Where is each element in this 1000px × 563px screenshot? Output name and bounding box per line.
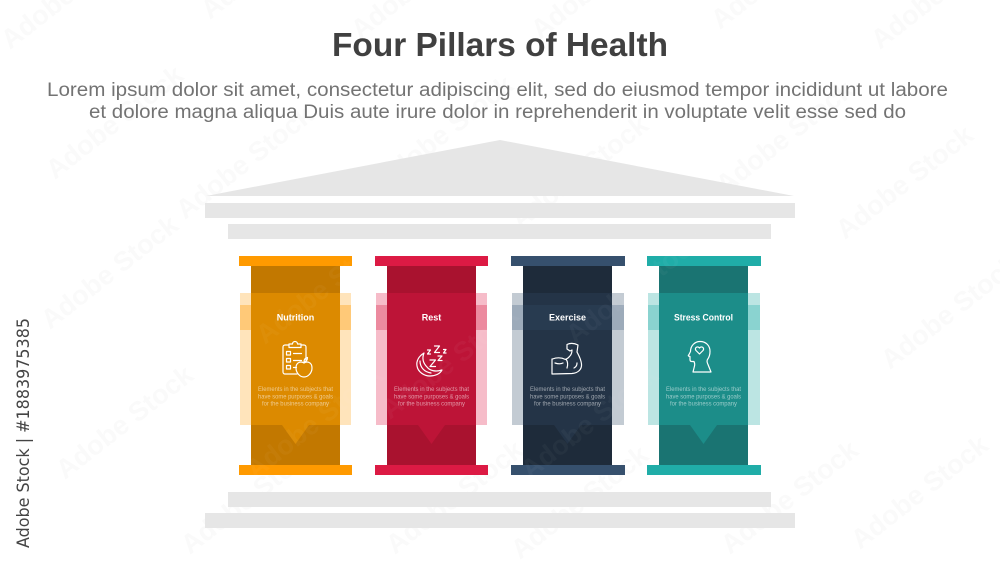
description: Elements in the subjects that xyxy=(666,386,741,393)
text: Adobe Stock xyxy=(505,109,655,235)
text: Adobe Stock xyxy=(240,359,390,485)
subtitle text block: et dolore magna aliqua Duis aute irure dolor in reprehenderit in voluptate velit esse sed do xyxy=(89,102,906,123)
description xyxy=(666,386,742,408)
icon: flexed arm xyxy=(552,343,582,374)
pillar: Exercise xyxy=(511,256,625,475)
description: for the business company xyxy=(534,400,602,408)
temple floor xyxy=(205,492,795,528)
text: Adobe Stock xyxy=(710,74,860,200)
description: have some purposes & goals xyxy=(666,394,742,400)
pillar: Stress Control xyxy=(647,256,761,475)
icon: clipboard and apple xyxy=(283,342,312,377)
text: Adobe Stock xyxy=(40,59,190,185)
description: for the business company xyxy=(262,400,330,408)
text: Adobe Stock xyxy=(370,69,520,195)
description xyxy=(394,386,470,408)
pillar: Rest xyxy=(375,256,488,475)
text: Adobe Stock xyxy=(250,224,400,350)
text: Adobe Stock xyxy=(505,439,655,563)
description xyxy=(258,386,334,408)
text: Adobe Stock xyxy=(560,224,710,350)
text: Adobe Stock xyxy=(375,299,525,425)
stock id vertical label: Adobe Stock | #1883975385 xyxy=(14,318,33,548)
description: Elements in the subjects that xyxy=(394,386,469,393)
description: have some purposes & goals xyxy=(530,394,606,400)
description xyxy=(530,386,606,408)
title: Four Pillars of Health xyxy=(332,26,668,63)
text: Adobe Stock xyxy=(515,359,665,485)
text: Adobe Stock xyxy=(715,434,865,560)
description: have some purposes & goals xyxy=(394,394,470,400)
text: Adobe Stock xyxy=(830,119,980,245)
subtitle text block xyxy=(47,80,948,123)
pillar: Nutrition xyxy=(239,256,352,475)
icon: head with heart xyxy=(688,342,711,372)
text: Adobe Stock xyxy=(170,99,320,225)
label: Rest: Rest xyxy=(422,312,441,322)
label: Stress Control: Stress Control xyxy=(674,312,733,322)
text: Adobe Stock xyxy=(35,209,185,335)
temple roof xyxy=(205,140,795,239)
description: for the business company xyxy=(670,400,738,408)
description: have some purposes & goals xyxy=(258,394,334,400)
description: Elements in the subjects that xyxy=(258,386,333,393)
description: for the business company xyxy=(398,400,466,408)
subtitle text block: Lorem ipsum dolor sit amet, consectetur adipiscing elit, sed do eiusmod tempor incididunt ut labore xyxy=(47,80,948,101)
text: Adobe Stock xyxy=(175,434,325,560)
text: Adobe Stock xyxy=(50,359,200,485)
text: Adobe Stock xyxy=(845,429,995,555)
text: Adobe Stock xyxy=(380,434,530,560)
icon: moon and zzz xyxy=(417,346,446,376)
label: Nutrition: Nutrition xyxy=(277,312,314,322)
label: Exercise: Exercise xyxy=(549,312,586,322)
description: Elements in the subjects that xyxy=(530,386,605,393)
